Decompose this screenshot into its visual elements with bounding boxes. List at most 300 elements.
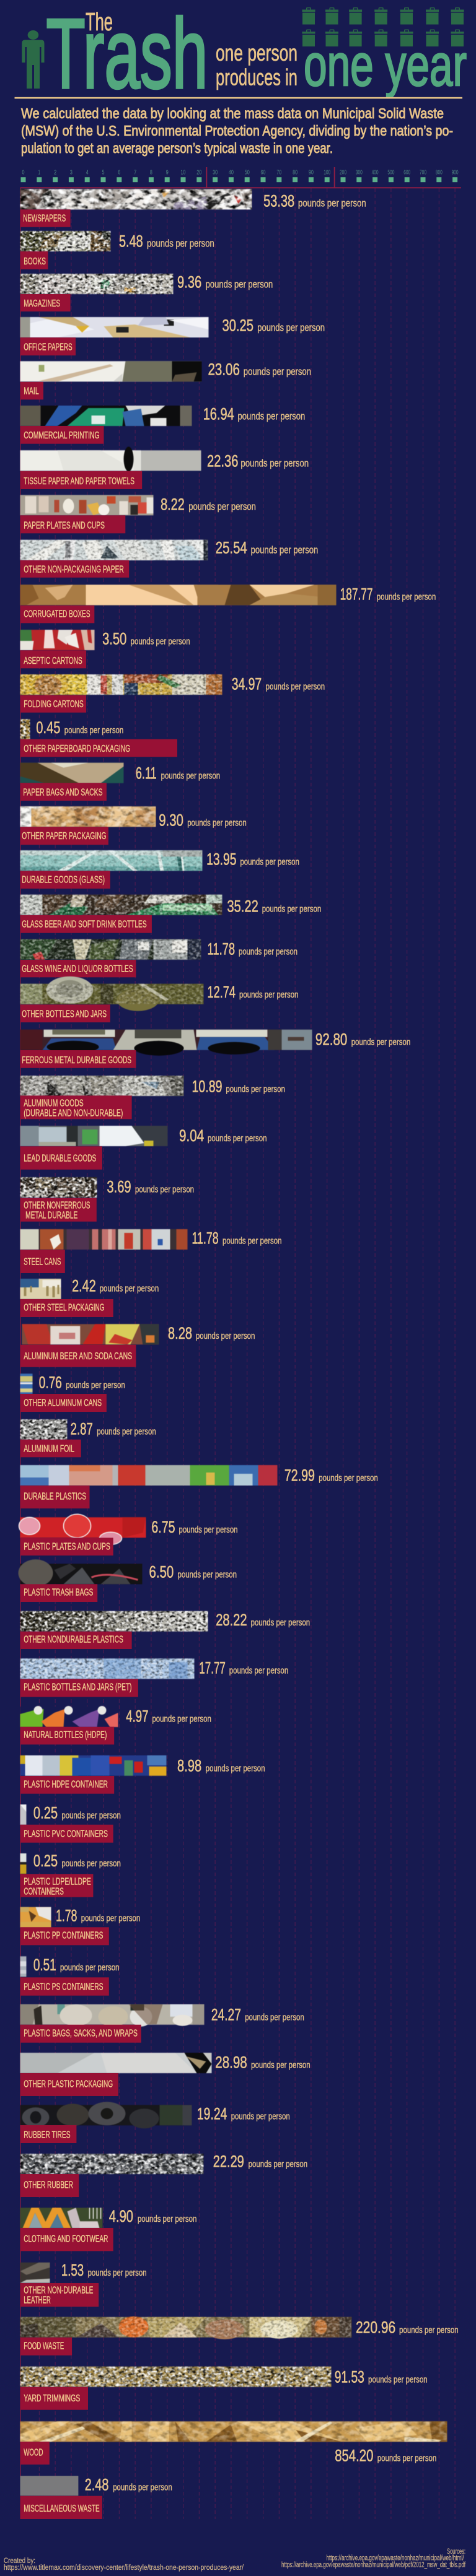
value: paper plates: 8.22	[161, 495, 185, 514]
value: other rubber	[213, 2152, 307, 2170]
value: plastic plates and cups: pounds per person	[178, 1525, 238, 1535]
title words: one person: one person	[216, 40, 298, 66]
value: folding cartons: pounds per person	[266, 682, 325, 692]
row: glass wine	[20, 939, 298, 977]
label: folding cartons	[20, 695, 86, 713]
row: rubber tires	[20, 2102, 290, 2143]
label: rubber tires: RUBBER TIRES	[24, 2130, 71, 2140]
label: other paperboard packaging: OTHER PAPERBOARD PACKAGING	[24, 744, 130, 754]
label: durable plastics	[20, 1486, 89, 1508]
row: durable glass	[20, 850, 299, 889]
label: other plastic packaging	[20, 2073, 118, 2096]
row: paper bags	[20, 763, 220, 801]
label: aluminum goods	[20, 1095, 132, 1119]
photo: paper plates and cups	[20, 494, 154, 516]
value: durable plastics: 72.99	[284, 1466, 315, 1485]
value: plastic LDPE: 0.25	[33, 1852, 58, 1870]
axis numbers: 8	[150, 170, 152, 176]
value: paper bags: 6.11	[136, 764, 157, 782]
value: plastic PVC: 0.25	[33, 1804, 58, 1822]
value: plastic trash bags: pounds per person	[177, 1570, 237, 1580]
value: other nonferrous: pounds per person	[135, 1185, 194, 1195]
value: other steel packaging: 2.42	[72, 1277, 96, 1295]
photo: plastic bags, sacks, and wraps	[20, 2004, 205, 2027]
row: other aluminum cans	[20, 1373, 125, 1412]
row: ferrous metal	[20, 1030, 410, 1068]
value: tissue paper	[207, 451, 309, 470]
value: magazines: pounds per person	[206, 279, 273, 290]
axis numbers: 200	[340, 170, 346, 176]
row: aluminum goods	[20, 1076, 285, 1119]
value: other steel packaging: pounds per person	[100, 1284, 159, 1294]
axis numbers: 50	[245, 170, 250, 176]
photo: clothing and footwear	[20, 2208, 103, 2228]
row: folding cartons	[20, 674, 325, 713]
label: wood	[20, 2442, 50, 2465]
photo: corrugated boxes	[20, 584, 337, 606]
label: PET bottles: PLASTIC BOTTLES AND JARS (PET)	[24, 1682, 132, 1693]
label: tissue paper	[20, 471, 142, 489]
row: other rubber	[20, 2152, 307, 2197]
value: plastic PVC: pounds per person	[61, 1811, 121, 1821]
value: paper plates	[161, 495, 256, 514]
value: steel cans	[192, 1229, 281, 1248]
value: magazines: 9.36	[177, 273, 201, 292]
photo: food waste	[20, 2317, 352, 2339]
photo: plastic PVC containers	[20, 1804, 27, 1825]
photo: ferrous metal durable goods	[20, 1029, 312, 1056]
row: plastic PS	[20, 1956, 119, 1996]
label: other paper packaging: OTHER PAPER PACKAGING	[22, 831, 106, 842]
label: aluminum foil: ALUMINUM FOIL	[24, 1443, 74, 1454]
value: plastic HDPE container: 8.98	[177, 1757, 201, 1775]
value: durable glass	[206, 850, 299, 868]
row: PET bottles	[20, 1658, 288, 1697]
row: other paperboard packaging	[20, 718, 177, 757]
value: leather: pounds per person	[88, 2268, 147, 2278]
value: durable plastics: pounds per person	[319, 1474, 378, 1484]
value: plastic bags: pounds per person	[245, 2013, 304, 2023]
photo: durable goods glass	[20, 850, 203, 872]
row: plastic PVC	[20, 1804, 121, 1843]
label: other aluminum cans: OTHER ALUMINUM CANS	[24, 1398, 102, 1409]
photo: books	[20, 230, 112, 252]
label: food waste	[20, 2338, 72, 2356]
photo: office papers	[20, 316, 209, 338]
photo: other non-durable leather	[20, 2263, 50, 2283]
value: other paper packaging: pounds per person	[187, 819, 247, 829]
label: plastic plates and cups	[20, 1538, 113, 1556]
value: durable glass: 13.95	[206, 850, 237, 868]
value: commercial printing: pounds per person	[238, 411, 305, 422]
row: steel cans	[20, 1229, 281, 1273]
value: other nondurable plastics	[216, 1611, 310, 1629]
row: other plastic packaging	[20, 2053, 311, 2096]
label: leather: OTHER NON-DURABLE	[24, 2285, 93, 2295]
label: ferrous metal: FERROUS METAL DURABLE GOODS	[22, 1055, 131, 1066]
photo: plastic PS containers	[20, 1956, 27, 1977]
label: miscellaneous waste	[20, 2496, 102, 2519]
photo: mail	[20, 360, 202, 383]
photo: other paperboard packaging	[20, 718, 31, 739]
label: plastic HDPE container	[20, 1776, 114, 1794]
axis numbers	[22, 170, 459, 176]
label: glass wine	[20, 960, 136, 977]
label: PET bottles	[20, 1679, 138, 1697]
photo: other bottles and jars	[20, 976, 204, 1012]
label: miscellaneous waste: MISCELLANEOUS WASTE	[24, 2504, 100, 2514]
label: other rubber	[20, 2174, 79, 2197]
value: plastic PS: pounds per person	[60, 1963, 119, 1973]
value: other nonferrous: 3.69	[107, 1178, 131, 1196]
row: miscellaneous waste	[20, 2475, 172, 2519]
value: corrugated boxes: pounds per person	[377, 593, 436, 603]
title	[22, 0, 467, 109]
title words: produces in: produces in	[216, 64, 298, 90]
label: other bottles: OTHER BOTTLES AND JARS	[22, 1009, 107, 1020]
value: other paperboard packaging: pounds per person	[64, 726, 123, 736]
photo: plastic plates and cups	[18, 1513, 146, 1546]
value: wood: pounds per person	[377, 2453, 436, 2463]
photo: glass wine bottles	[20, 939, 201, 960]
value: plastic LDPE: pounds per person	[61, 1859, 121, 1869]
label: natural bottles: NATURAL BOTTLES (HDPE)	[24, 1730, 107, 1741]
axis numbers: 7	[134, 170, 136, 176]
label: aseptic cartons	[20, 650, 86, 668]
photo: aluminum foil	[20, 1419, 68, 1440]
intro paragraph: pulation to get an average person’s typical waste in one year.	[21, 140, 333, 156]
photo: other nondurable plastics	[20, 1610, 208, 1632]
axis numbers: 40	[229, 170, 234, 176]
row: lead durable goods	[20, 1126, 267, 1170]
value: plastic bags: 24.27	[211, 2006, 241, 2024]
value: other steel packaging	[72, 1277, 159, 1295]
photo: lead durable goods	[20, 1125, 168, 1147]
row: aluminum beer and soda cans	[20, 1324, 255, 1367]
label: other nonferrous: METAL DURABLE	[25, 1210, 77, 1221]
label: books: BOOKS	[24, 256, 46, 267]
label: plastic HDPE container: PLASTIC HDPE CONTAINER	[24, 1780, 108, 1790]
axis numbers: 4	[86, 170, 89, 176]
value: office papers: 30.25	[222, 316, 253, 335]
value: plastic PP: 1.78	[56, 1907, 77, 1925]
value: food waste: pounds per person	[399, 2326, 459, 2336]
intro paragraph	[21, 105, 453, 156]
label: glass beer	[20, 915, 152, 933]
label: mail	[20, 382, 43, 399]
axis numbers: 400	[372, 170, 379, 176]
photo: commercial printing	[20, 405, 192, 427]
label: magazines	[20, 294, 71, 311]
label: yard trimmings: YARD TRIMMINGS	[24, 2393, 80, 2404]
label: plastic PVC	[20, 1825, 113, 1843]
label: corrugated boxes	[20, 606, 94, 623]
axis numbers: 0	[22, 170, 25, 176]
label: steel cans	[20, 1250, 65, 1273]
row: books	[20, 231, 214, 269]
photo: plastic trash bags	[18, 1559, 143, 1585]
row: aseptic cartons	[20, 629, 190, 668]
photo: plastic PP containers	[20, 1906, 52, 1928]
photo: other paper packaging	[20, 806, 156, 827]
label: lead durable goods	[20, 1146, 102, 1170]
label: plastic bags	[20, 2025, 141, 2043]
axis numbers: 5	[102, 170, 105, 176]
label: other aluminum cans	[20, 1394, 107, 1412]
value: plastic PVC	[33, 1804, 121, 1822]
photo: folding cartons	[20, 674, 223, 695]
value: steel cans: pounds per person	[223, 1237, 281, 1247]
value: glass wine: 11.78	[207, 940, 235, 959]
axis numbers: 60	[260, 170, 266, 176]
value: aluminum foil: 2.87	[71, 1419, 93, 1438]
label: rubber tires	[20, 2125, 76, 2143]
axis line	[20, 167, 461, 188]
label: aluminum goods: (DURABLE AND NON-DURABLE)	[24, 1108, 123, 1119]
value: other paper packaging	[159, 811, 247, 830]
value: office papers: pounds per person	[257, 323, 325, 334]
value: ferrous metal	[315, 1030, 410, 1049]
value: other aluminum cans: pounds per person	[66, 1380, 125, 1390]
photo: natural bottles HDPE	[20, 1705, 119, 1728]
photo: glass beer bottles	[20, 894, 223, 915]
value: mail	[208, 360, 311, 378]
axis numbers: 6	[118, 170, 121, 176]
label: office papers: OFFICE PAPERS	[24, 342, 73, 352]
value: aluminum foil	[71, 1419, 156, 1438]
row: commercial printing	[20, 405, 305, 444]
value: mail: 23.06	[208, 360, 240, 378]
label: plastic LDPE: PLASTIC LDPE/LLDPE	[24, 1876, 91, 1887]
photo: aluminum beer and soda cans	[21, 1323, 159, 1345]
value: other plastic packaging: 28.98	[215, 2053, 247, 2071]
label: other rubber: OTHER RUBBER	[24, 2180, 73, 2190]
value: plastic plates and cups: 6.75	[151, 1518, 175, 1536]
label: steel cans: STEEL CANS	[24, 1256, 61, 1267]
row: other non-packaging paper	[20, 538, 318, 578]
label: other plastic packaging: OTHER PLASTIC PACKAGING	[24, 2079, 113, 2090]
value: other rubber: 22.29	[213, 2152, 244, 2170]
label: food waste: FOOD WASTE	[24, 2341, 64, 2352]
photo: durable plastics	[20, 1464, 278, 1486]
row: yard trimmings	[20, 2367, 428, 2410]
label: clothing and footwear: CLOTHING AND FOOTWEAR	[24, 2234, 108, 2245]
value: leather	[61, 2261, 147, 2279]
title word: The: The	[86, 7, 113, 36]
axis numbers: 3	[70, 170, 73, 176]
axis numbers: 20	[196, 170, 202, 176]
axis numbers: 2	[54, 170, 56, 176]
value: wood: 854.20	[335, 2446, 373, 2465]
value: miscellaneous waste: pounds per person	[113, 2482, 172, 2492]
label: other nondurable plastics: OTHER NONDURABLE PLASTICS	[24, 1635, 123, 1645]
label: clothing and footwear	[20, 2228, 113, 2251]
photo: magazines	[20, 273, 174, 295]
label: ferrous metal	[20, 1050, 136, 1068]
row: other nondurable plastics	[20, 1611, 310, 1649]
value: aluminum goods: pounds per person	[226, 1084, 285, 1094]
value: natural bottles: 4.97	[126, 1707, 149, 1725]
row: other paper packaging	[20, 806, 247, 845]
label: plastic trash bags	[20, 1584, 97, 1602]
row: durable plastics	[20, 1465, 378, 1508]
value: miscellaneous waste	[85, 2475, 172, 2494]
footer: created by: Created by:	[4, 2557, 35, 2565]
label: aluminum goods: ALUMINUM GOODS	[24, 1099, 84, 1109]
row: newspapers	[20, 189, 366, 227]
label: plastic plates and cups: PLASTIC PLATES AND CUPS	[24, 1541, 110, 1552]
photo: aseptic cartons	[20, 629, 95, 651]
value: plastic plates and cups	[151, 1518, 238, 1536]
label: lead durable goods: LEAD DURABLE GOODS	[24, 1154, 96, 1164]
label: plastic trash bags: PLASTIC TRASH BAGS	[24, 1588, 93, 1598]
value: yard trimmings	[335, 2368, 428, 2387]
label: aluminum beer and soda cans: ALUMINUM BEER AND SODA CANS	[24, 1351, 132, 1362]
row: office papers	[20, 316, 325, 355]
label: mail: MAIL	[24, 386, 39, 397]
icon: person	[22, 30, 45, 89]
label: other steel packaging: OTHER STEEL PACKAGING	[24, 1302, 105, 1313]
axis numbers: 500	[387, 170, 395, 176]
value: miscellaneous waste: 2.48	[85, 2475, 108, 2494]
value: plastic trash bags	[149, 1563, 237, 1582]
value: newspapers: pounds per person	[298, 198, 366, 209]
value: glass wine: pounds per person	[239, 947, 298, 957]
value: steel cans: 11.78	[192, 1229, 219, 1248]
value: ferrous metal: 92.80	[315, 1030, 347, 1049]
label: newspapers: NEWSPAPERS	[23, 213, 66, 224]
axis numbers: 1	[38, 170, 40, 176]
value: other nondurable plastics: 28.22	[216, 1611, 247, 1629]
axis numbers: 700	[420, 170, 426, 176]
value: other bottles: 12.74	[207, 983, 236, 1001]
value: other non-packaging paper	[216, 538, 318, 557]
footer: created by: https://www.titlemax.com/discovery-center/lifestyle/trash-one-person-produces-year/	[4, 2564, 244, 2572]
axis numbers: 10	[181, 170, 186, 176]
label: other non-packaging paper	[20, 560, 129, 578]
value: other paperboard packaging	[36, 718, 123, 737]
label: office papers	[20, 337, 76, 355]
axis numbers: 300	[356, 170, 363, 176]
value: other aluminum cans	[39, 1373, 125, 1391]
axis numbers: 900	[452, 170, 459, 176]
photo: plastic LDPE containers	[20, 1853, 27, 1874]
value: paper bags	[136, 764, 220, 782]
value: other nondurable plastics: pounds per person	[251, 1618, 310, 1628]
value: aluminum beer and soda cans: 8.28	[168, 1324, 192, 1342]
value: food waste	[356, 2318, 459, 2337]
label: corrugated boxes: CORRUGATED BOXES	[24, 609, 90, 620]
value: lead durable goods: pounds per person	[208, 1134, 267, 1144]
label: other paper packaging	[20, 827, 108, 845]
label: paper bags	[20, 783, 107, 801]
row: plastic PP	[20, 1907, 140, 1945]
label: magazines: MAGAZINES	[24, 298, 60, 309]
value: natural bottles	[126, 1707, 211, 1725]
title word: Trash: Trash	[46, 0, 208, 109]
value: lead durable goods	[179, 1126, 267, 1145]
value: paper plates: pounds per person	[188, 502, 256, 513]
photo: wood	[20, 2421, 447, 2442]
label: paper plates: PAPER PLATES AND CUPS	[24, 520, 105, 531]
value: other non-packaging paper: pounds per person	[251, 544, 318, 555]
row: plastic trash bags	[19, 1559, 237, 1602]
label: plastic LDPE	[20, 1874, 93, 1897]
label: wood: WOOD	[24, 2447, 43, 2458]
value: books: pounds per person	[147, 238, 214, 249]
label: durable glass	[20, 871, 110, 889]
photo: yard trimmings	[20, 2367, 331, 2387]
value: mail: pounds per person	[244, 366, 311, 377]
photo: plastic bottles and jars PET	[20, 1658, 195, 1679]
label: aluminum foil	[20, 1440, 81, 1457]
value: glass beer: pounds per person	[262, 904, 321, 914]
label: plastic PVC: PLASTIC PVC CONTAINERS	[24, 1829, 108, 1840]
row: plastic bags	[20, 2004, 304, 2043]
value: leather: 1.53	[61, 2261, 84, 2279]
photo: aluminum goods	[20, 1075, 184, 1097]
value: magazines	[177, 273, 273, 292]
photo: newspapers	[20, 188, 253, 211]
axis numbers: 90	[309, 170, 314, 176]
value: aseptic cartons	[102, 629, 190, 648]
label: other non-packaging paper: OTHER NON-PACKAGING PAPER	[24, 565, 124, 575]
value: folding cartons	[232, 675, 325, 694]
label: paper plates	[20, 515, 125, 533]
row: mail	[20, 360, 311, 399]
photo: plastic HDPE container	[20, 1755, 167, 1776]
axis numbers: 800	[436, 170, 443, 176]
value: clothing and footwear: 4.90	[109, 2207, 133, 2226]
value: newspapers: 53.38	[263, 191, 294, 210]
value: newspapers	[263, 191, 366, 210]
label: paper bags: PAPER BAGS AND SACKS	[23, 787, 103, 798]
axis scale	[20, 167, 461, 188]
label: newspapers	[20, 209, 71, 227]
value: commercial printing	[203, 405, 305, 424]
photo: paper bags and sacks	[20, 762, 124, 784]
value: plastic HDPE container: pounds per person	[206, 1764, 265, 1774]
photo: other rubber	[20, 2154, 203, 2174]
value: tissue paper: 22.36	[207, 451, 238, 470]
axis numbers: 80	[293, 170, 298, 176]
value: tissue paper: pounds per person	[240, 458, 309, 469]
footer: created by	[4, 2557, 244, 2572]
row: corrugated boxes	[20, 585, 436, 623]
label: plastic PP: PLASTIC PP CONTAINERS	[24, 1931, 104, 1941]
value: aluminum beer and soda cans	[168, 1324, 255, 1342]
value: other plastic packaging: pounds per person	[251, 2060, 311, 2070]
value: plastic PP: pounds per person	[81, 1914, 140, 1924]
label: commercial printing: COMMERCIAL PRINTING	[24, 430, 100, 441]
value: yard trimmings: pounds per person	[368, 2375, 428, 2385]
label: other nonferrous: OTHER NONFERROUS	[24, 1200, 90, 1211]
label: leather: LEATHER	[24, 2295, 51, 2305]
label: commercial printing	[20, 426, 104, 444]
value: plastic trash bags: 6.50	[149, 1563, 174, 1582]
value: rubber tires: pounds per person	[231, 2112, 290, 2121]
value: folding cartons: 34.97	[232, 675, 262, 694]
value: other plastic packaging	[215, 2053, 311, 2071]
photo: other steel packaging	[20, 1278, 62, 1299]
label: other paperboard packaging	[20, 739, 177, 757]
value: aluminum beer and soda cans: pounds per person	[196, 1331, 255, 1341]
value: aluminum goods	[192, 1077, 285, 1095]
label: durable glass: DURABLE GOODS (GLASS)	[22, 875, 105, 886]
value: plastic PS	[33, 1956, 120, 1974]
row: plastic plates and cups	[19, 1514, 238, 1556]
value: plastic PS: 0.51	[33, 1956, 56, 1974]
